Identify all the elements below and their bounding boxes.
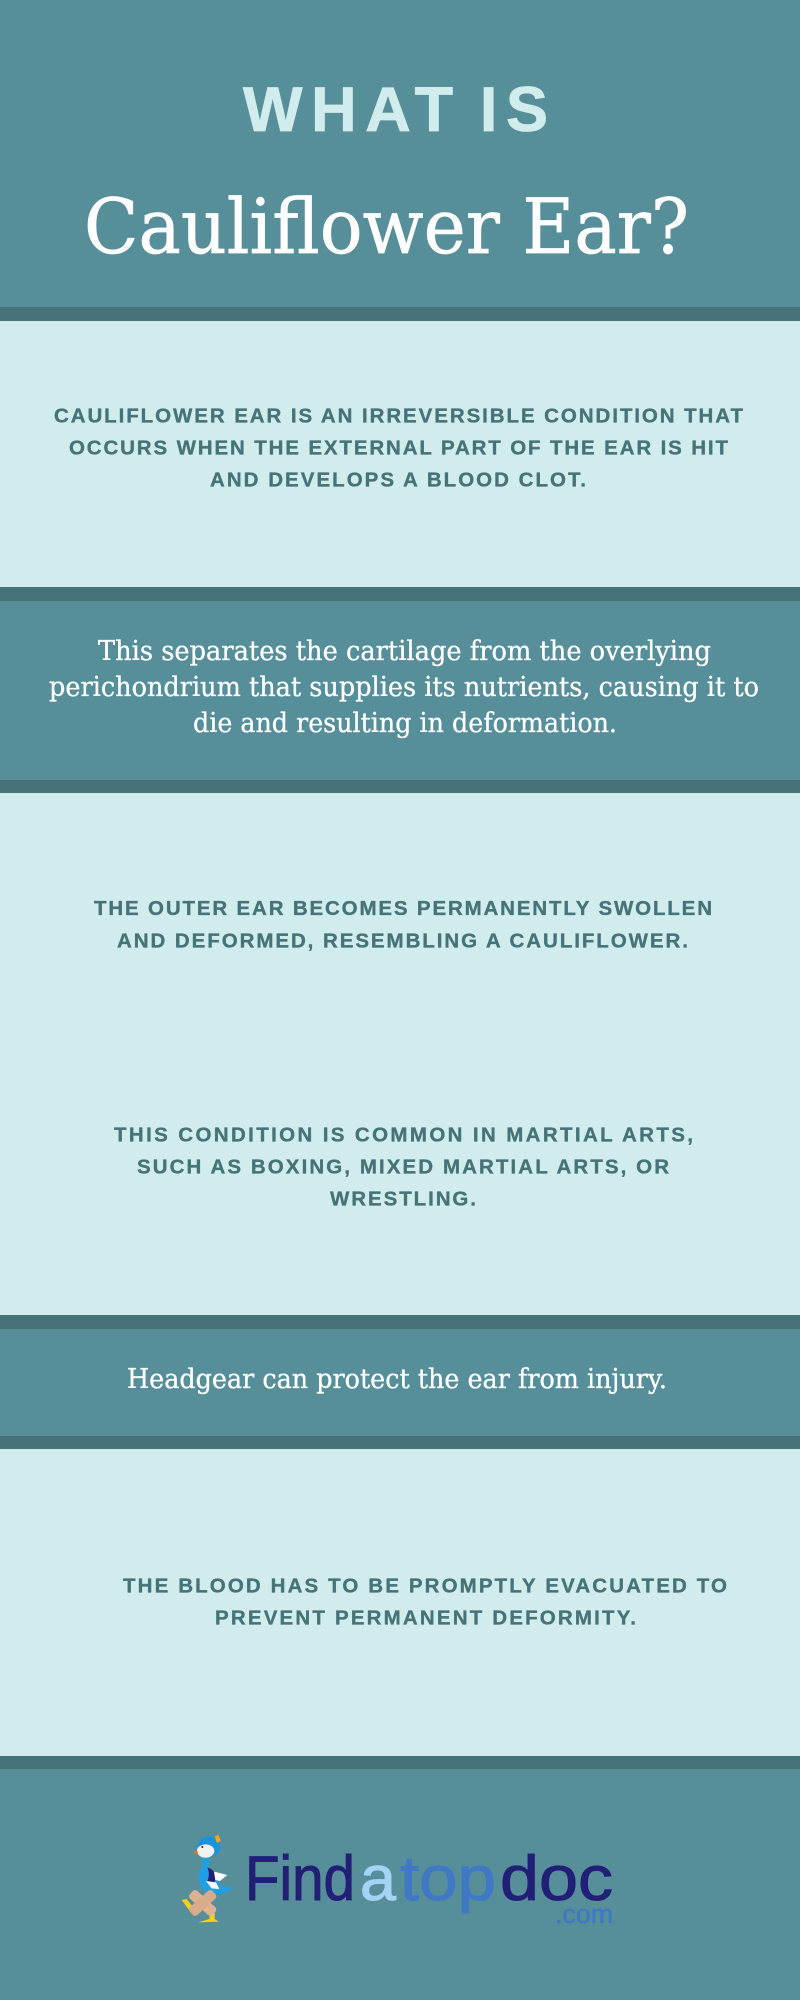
text: mechanism: This separates the cartilage from the overlying — [98, 635, 711, 667]
panel: definition — [0, 321, 800, 587]
text: definition: OCCURS WHEN THE EXTERNAL PART OF THE EAR IS HIT — [69, 436, 728, 460]
logo: findatopdoc wordmark: top — [400, 1844, 496, 1914]
text: martial arts: THIS CONDITION IS COMMON IN MARTIAL ARTS, — [114, 1124, 693, 1146]
logo: findatopdoc wordmark: Find — [245, 1844, 355, 1914]
text: definition: AND DEVELOPS A BLOOD CLOT. — [210, 468, 586, 492]
panel: headgear — [0, 1329, 800, 1436]
text: martial arts: SUCH AS BOXING, MIXED MARTIAL ARTS, OR — [137, 1156, 669, 1178]
panel: title header — [0, 0, 800, 307]
text: treatment: THE BLOOD HAS TO BE PROMPTLY EVACUATED TO — [123, 1574, 727, 1598]
panel: mechanism — [0, 601, 800, 780]
text: martial arts: WRESTLING. — [330, 1188, 476, 1210]
title: cauliflower ear: Cauliflower Ear? — [84, 182, 689, 271]
logo: findatopdoc wordmark — [245, 1844, 613, 1929]
text: treatment: PREVENT PERMANENT DEFORMITY. — [215, 1606, 636, 1630]
text: mechanism: perichondrium that supplies its nutrients, causing it to — [49, 671, 759, 703]
logo: findatopdoc wordmark: doc — [500, 1844, 613, 1914]
text: swollen outer ear: THE OUTER EAR BECOMES PERMANENTLY SWOLLEN — [94, 897, 712, 920]
text: headgear: Headgear can protect the ear from injury. — [127, 1363, 667, 1395]
text: mechanism: die and resulting in deformation. — [193, 707, 617, 739]
text: treatment — [123, 1574, 727, 1630]
panel: symptoms and causes — [0, 793, 800, 1315]
text: definition: CAULIFLOWER EAR IS AN IRREVERSIBLE CONDITION THAT — [54, 404, 743, 428]
panel: treatment — [0, 1449, 800, 1756]
text: mechanism — [49, 635, 759, 739]
text: martial arts — [114, 1124, 693, 1210]
icon: duck mascot with bandage — [182, 1835, 233, 1922]
panel: footer — [0, 1769, 800, 2000]
logo: findatopdoc wordmark: a — [360, 1844, 397, 1914]
text: definition — [54, 404, 743, 492]
text: swollen outer ear: AND DEFORMED, RESEMBLING A CAULIFLOWER. — [117, 930, 688, 952]
logo: findatopdoc wordmark: .com — [555, 1899, 613, 1929]
text: swollen outer ear — [94, 897, 712, 952]
heading: what is: WHAT IS — [243, 75, 548, 145]
